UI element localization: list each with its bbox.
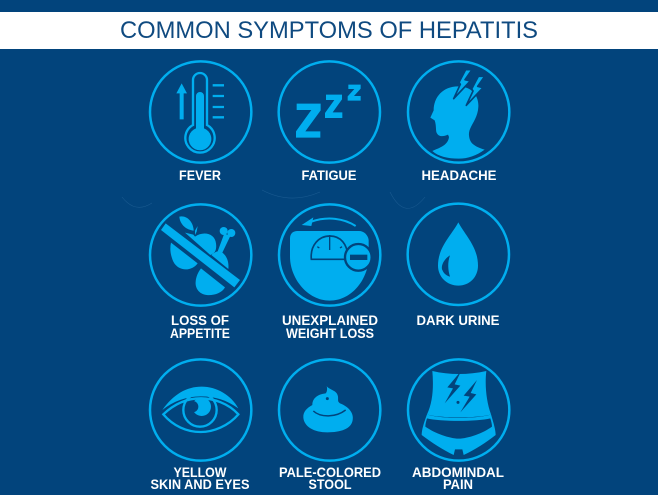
label: unexplained weight loss	[282, 313, 378, 341]
label: loss of appetite: LOSS OF	[171, 313, 229, 328]
label: pale-colored stool	[279, 465, 381, 492]
panel: unexplained weight loss	[279, 204, 380, 306]
panel: dark urine	[408, 204, 509, 305]
panel: abdominal pain	[408, 359, 509, 461]
icon: head with lightning	[430, 70, 485, 159]
icon: drop	[438, 222, 478, 286]
panel: pale-colored stool	[279, 359, 380, 461]
label: dark urine: DARK URINE	[416, 313, 500, 328]
icon: food crossed out	[161, 216, 240, 295]
label: abdominal pain: ABDOMINDAL	[412, 465, 504, 480]
label: fatigue: FATIGUE	[302, 168, 356, 183]
panel: loss of appetite	[150, 204, 251, 306]
label: yellow skin and eyes	[150, 465, 250, 492]
icon: thermometer	[176, 73, 224, 153]
label: loss of appetite: APPETITE	[170, 326, 230, 341]
label: unexplained weight loss: UNEXPLAINED	[282, 313, 378, 328]
title band	[0, 12, 658, 49]
panel: fatigue	[279, 61, 380, 163]
label: abdominal pain: PAIN	[443, 477, 473, 492]
icon: torso with lightning	[422, 371, 496, 455]
label: abdominal pain	[412, 465, 504, 492]
panel: fever	[150, 61, 251, 163]
title: COMMON SYMPTOMS OF HEPATITIS	[120, 17, 538, 44]
label: yellow skin and eyes: YELLOW	[174, 465, 227, 480]
icon: eye	[162, 387, 238, 432]
panel: headache	[408, 61, 509, 163]
label: pale-colored stool: PALE-COLORED	[279, 465, 381, 480]
label: headache: HEADACHE	[422, 168, 496, 183]
icon: zzz	[296, 85, 361, 138]
label: unexplained weight loss: WEIGHT LOSS	[286, 326, 374, 341]
label: fever: FEVER	[179, 168, 221, 183]
icon: stool	[303, 386, 353, 432]
label: loss of appetite	[170, 313, 230, 341]
label: pale-colored stool: STOOL	[308, 477, 352, 492]
label: yellow skin and eyes: SKIN AND EYES	[150, 477, 250, 492]
icon: scale	[290, 217, 372, 301]
panel: yellow skin and eyes	[150, 359, 251, 461]
